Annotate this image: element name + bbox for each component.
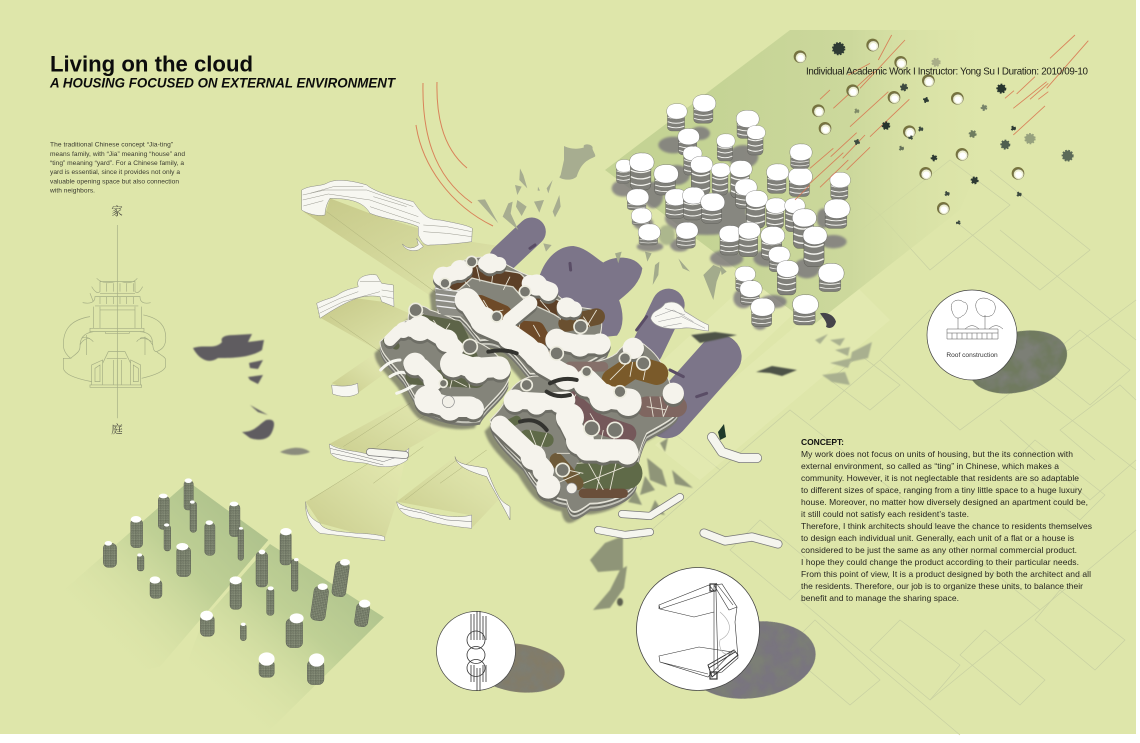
lower-left column field bbox=[60, 478, 384, 733]
shadow band: towers plot bbox=[605, 30, 1040, 326]
text: jia-ting introduction: means family, with “Jia” meaning “house” and bbox=[50, 151, 185, 158]
detail: roof construction bbox=[927, 290, 1074, 403]
title: Living on the cloud bbox=[50, 52, 253, 76]
paddle fingers left bbox=[381, 360, 417, 393]
roof section drawing bbox=[947, 298, 1003, 339]
cast shadow bbox=[375, 268, 678, 523]
title: A HOUSING FOCUSED ON EXTERNAL ENVIRONMENT bbox=[49, 75, 397, 90]
chinese character: ting: 庭 bbox=[111, 421, 123, 437]
tree canopies bbox=[833, 43, 1073, 224]
red site lines: arcs bbox=[416, 82, 493, 226]
text: jia-ting introduction: with neighbors. bbox=[49, 188, 95, 195]
pale grout lines bbox=[410, 267, 672, 490]
white column tops bbox=[105, 478, 370, 667]
ink fragments above the main building bbox=[477, 144, 595, 252]
field shadow left bbox=[60, 482, 268, 690]
ink fragments right of main building bbox=[590, 332, 872, 610]
purple ink shadows behind the main building bbox=[503, 232, 720, 417]
texture ellipse: unit bbox=[683, 613, 821, 707]
concept text: to design each individual unit. Generally, each unit of a flat or a house is bbox=[801, 533, 1074, 543]
ink fragments between towers and main building bbox=[615, 252, 727, 300]
concept text: it still could not satisfy each resident’s taste. bbox=[801, 509, 969, 519]
mesh columns bbox=[103, 481, 370, 685]
tiled courtyards bbox=[387, 270, 677, 493]
small cloud strips lower right bbox=[370, 437, 778, 544]
dark slots bbox=[488, 350, 577, 430]
concept text: considered to be just the same as any other normal commercial product. bbox=[801, 545, 1077, 555]
court openings bbox=[409, 256, 650, 494]
small cloud right of main building bbox=[651, 302, 708, 331]
light wells bbox=[794, 39, 1024, 215]
cloud strip 1 bbox=[302, 180, 472, 245]
red diagonal lines bbox=[795, 35, 1088, 200]
concept text: external environment, so called as “ting” in Chinese, which makes a bbox=[801, 461, 1059, 471]
olive extrusions and cloud strips bbox=[302, 180, 510, 541]
cloud strip 5 bbox=[306, 502, 385, 541]
tower shadows bbox=[612, 127, 847, 330]
title bbox=[49, 52, 397, 90]
text: jia-ting introduction: The traditional Chinese concept “Jia-ting” bbox=[50, 142, 173, 148]
concept text: to different sizes of space, ranging from a tiny little space to a huge luxury bbox=[801, 485, 1083, 495]
unit frame drawing bbox=[659, 583, 738, 679]
cloud strip 1 tail bbox=[402, 238, 423, 251]
column drawing bbox=[467, 611, 486, 691]
cloud strip 4 bbox=[329, 444, 409, 467]
project credits: Individual Academic Work I Instructor: Yong Su I Duration: 2010/09-10 bbox=[806, 67, 1089, 78]
trees, wells and red lines bbox=[794, 35, 1088, 224]
detail: column node bbox=[436, 611, 568, 698]
concept text: I hope they could change the product according to their particular needs. bbox=[801, 557, 1079, 567]
text: jia-ting introduction: “ting” meaning “yard”. For a Chinese family, a bbox=[50, 160, 184, 167]
cloud strip 2 bbox=[317, 275, 394, 318]
concept text: From this point of view, It is a product designed by both the architect and all bbox=[801, 569, 1091, 579]
concept text: benefit and to manage the sharing space. bbox=[801, 593, 959, 603]
detail circle: unit bbox=[636, 568, 760, 690]
texture ellipse: roof bbox=[962, 321, 1074, 403]
tower blocks bbox=[616, 95, 851, 327]
text: jia-ting introduction: yard is essential, since it provides not only a bbox=[50, 169, 180, 176]
concept text: My work does not focus on units of housing, but the its connection with bbox=[801, 449, 1073, 459]
courtyard house line drawing bbox=[63, 225, 166, 418]
detail circle: roof bbox=[927, 290, 1017, 380]
towers plot bbox=[612, 95, 851, 330]
cloud strip 3 bbox=[332, 383, 358, 397]
white roof slab edges bbox=[390, 256, 684, 502]
dark ink hump bbox=[820, 313, 836, 328]
concept text: community. However, it is not neglectable that residents are so adaptable bbox=[801, 473, 1079, 483]
cloud strip 7 bbox=[455, 457, 510, 520]
tower stack at top left bbox=[435, 282, 465, 317]
label: roof construction: Roof construction bbox=[946, 352, 998, 359]
detail: unit frame bbox=[636, 568, 821, 707]
white roof tops bbox=[390, 253, 684, 499]
ink fragments on the left bbox=[193, 334, 310, 455]
text: jia-ting introduction: valuable opening space but also connection bbox=[50, 178, 179, 186]
stacked floors bbox=[380, 257, 683, 520]
cloud strip 6 bbox=[397, 502, 472, 528]
chinese character: jia: 家 bbox=[111, 203, 123, 219]
background plan lines bbox=[620, 160, 1136, 735]
main cloud housing complex bbox=[375, 253, 684, 523]
dark plant accent bbox=[718, 424, 726, 440]
field shadow right bbox=[160, 544, 384, 733]
extrusion bands bbox=[303, 198, 503, 538]
concept text: the residents. Therefore, our job is to organize these units, to balance their bbox=[801, 581, 1083, 591]
concept text: house. Moreover, no matter how diversely designed an apartment could be, bbox=[801, 497, 1088, 507]
concept text: Therefore, I think architects should leave the chance to residents themselves bbox=[801, 521, 1092, 531]
texture ellipse: column bbox=[468, 638, 568, 698]
concept text: CONCEPT: bbox=[801, 437, 844, 447]
concept text bbox=[801, 437, 1092, 603]
detail circle: column bbox=[436, 612, 516, 690]
text: jia-ting introduction bbox=[49, 142, 185, 195]
pale diagonal ground bands bbox=[625, 235, 890, 480]
